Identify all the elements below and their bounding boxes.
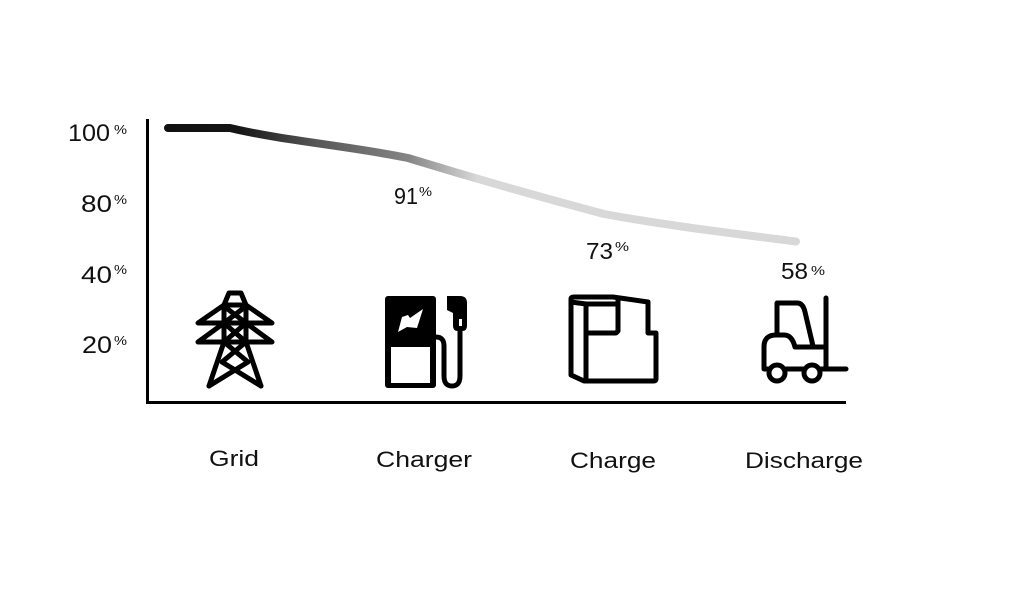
y axis labels: 20 (82, 332, 112, 359)
y axis labels (68, 120, 127, 359)
category labels: Charge (570, 448, 656, 473)
y axis labels: 100 (68, 120, 110, 147)
value: 58% (781, 258, 826, 284)
y axis labels: 80 (81, 191, 112, 218)
value: 58%: 58 (781, 258, 808, 284)
icon: forklift (764, 298, 846, 381)
value: 91%: % (419, 184, 432, 199)
y axis labels: % (114, 122, 127, 137)
chart axes (146, 119, 846, 403)
value: 73%: 73 (586, 238, 613, 264)
icon: transmission tower (198, 293, 272, 386)
y axis labels: % (114, 333, 127, 348)
value: 91% (394, 183, 432, 209)
value: 58%: % (811, 263, 826, 278)
category labels: Charger (376, 447, 472, 472)
icon: partly filled battery box (571, 297, 656, 381)
category labels: Grid (209, 446, 259, 471)
value: 73%: % (615, 239, 630, 254)
category labels: Discharge (745, 448, 863, 473)
y axis labels: 40 (81, 262, 112, 289)
icon: charging station (385, 296, 467, 388)
lightning bolt (398, 309, 423, 332)
category labels (209, 446, 863, 473)
y axis labels: % (114, 192, 127, 207)
y axis labels: % (114, 262, 127, 277)
efficiency line (168, 128, 796, 242)
value: 73% (586, 238, 630, 264)
value: 91%: 91 (394, 183, 418, 209)
